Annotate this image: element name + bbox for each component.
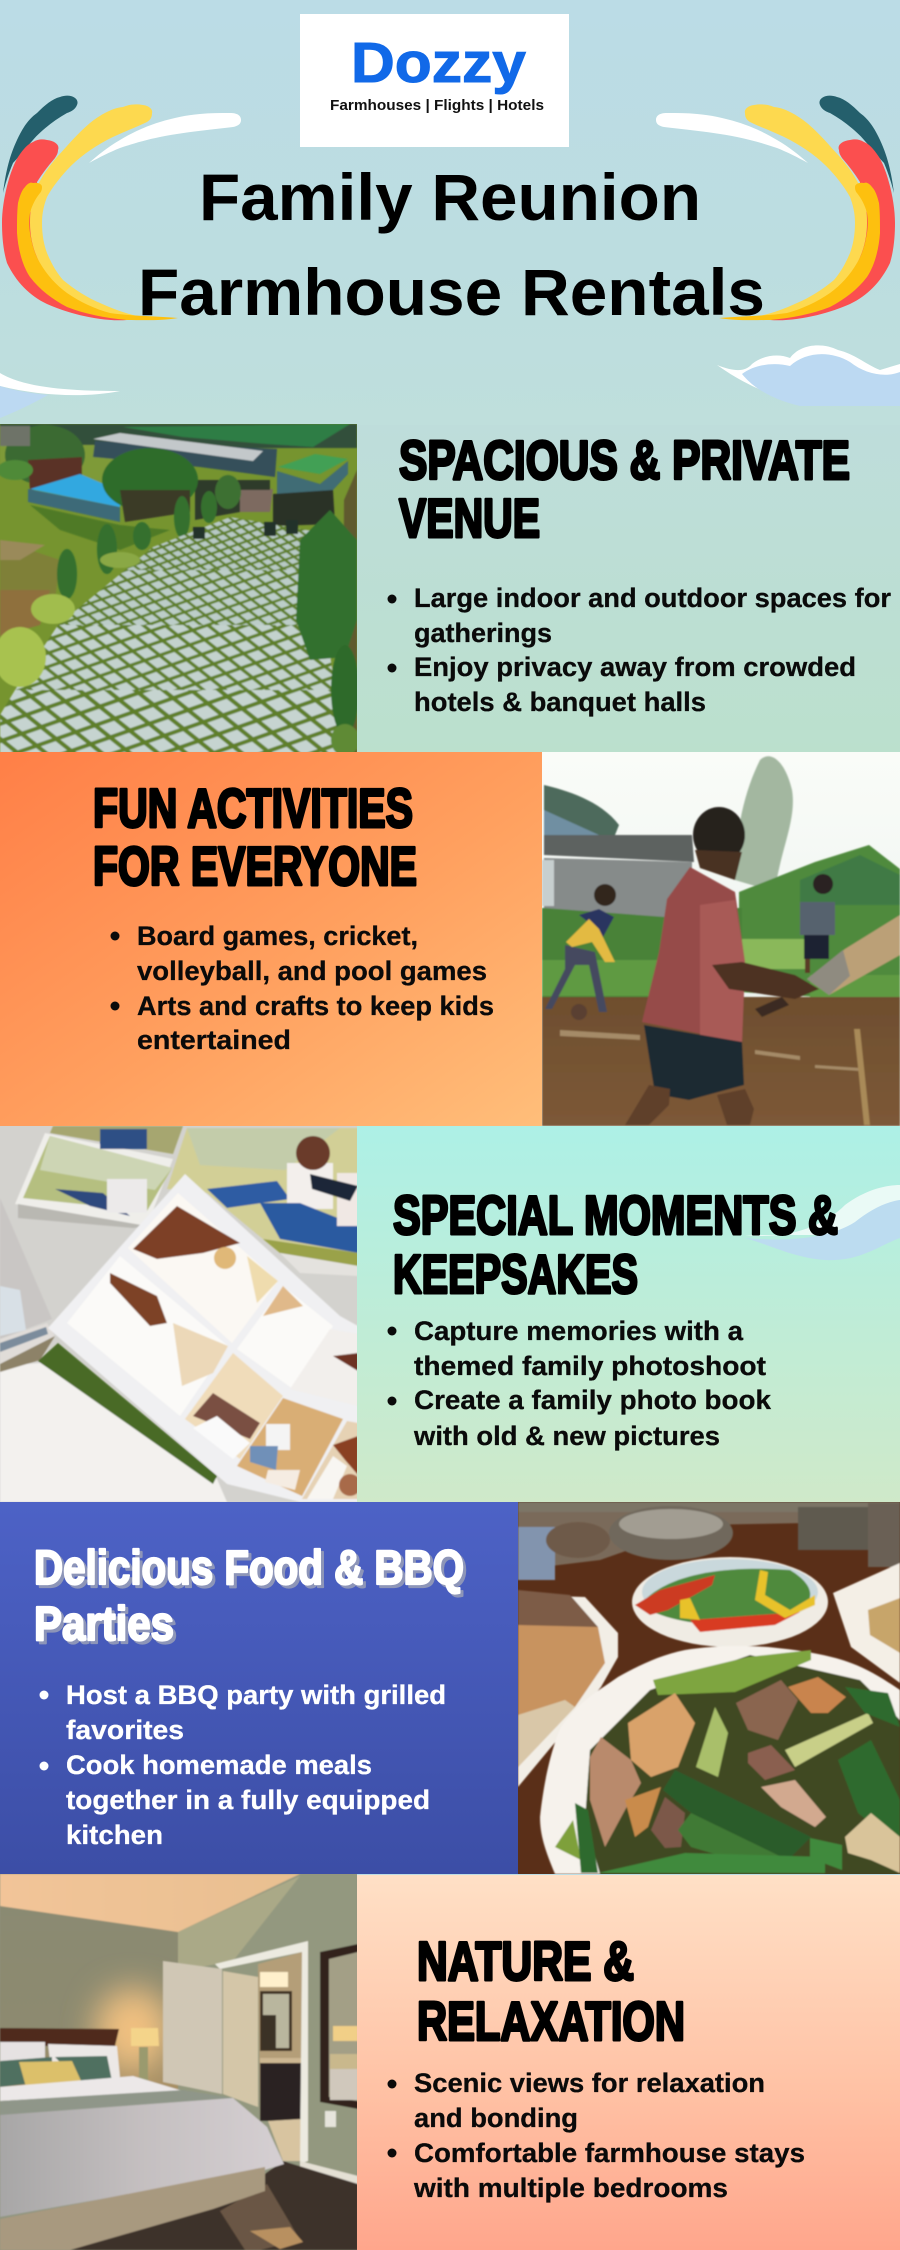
bullet list	[388, 583, 891, 717]
bullet list: Arts and crafts to keep kids	[137, 991, 494, 1021]
photo: aerial farmhouse with pool	[0, 424, 359, 756]
heading	[393, 1184, 838, 1305]
photo: boys playing cricket	[542, 752, 900, 1126]
bullet list: Scenic views for relaxation	[414, 2068, 765, 2098]
cloud: header right	[717, 345, 900, 406]
heading with shadow: Parties	[37, 1601, 177, 1654]
bullet list: gatherings	[414, 618, 552, 648]
bullet list: Capture memories with a	[414, 1316, 744, 1346]
heading with shadow: Parties	[34, 1598, 174, 1651]
heading with shadow: Delicious Food & BBQ	[34, 1542, 464, 1595]
bullet list: Board games, cricket,	[137, 921, 418, 951]
bullet list	[388, 1316, 772, 1451]
bullet list: Large indoor and outdoor spaces for	[414, 583, 891, 613]
heading: NATURE &	[417, 1930, 634, 1992]
bullet list: entertained	[137, 1025, 291, 1055]
heading	[417, 1930, 685, 2052]
heading: FOR EVERYONE	[93, 835, 417, 897]
photo: farmhouse bedroom	[0, 1874, 358, 2250]
bullet list	[110, 921, 494, 1055]
bullet list: Create a family photo book	[414, 1385, 772, 1415]
heading: FUN ACTIVITIES	[93, 777, 413, 839]
bullet list: hotels & banquet halls	[414, 687, 706, 717]
bullet list: Enjoy privacy away from crowded	[414, 652, 856, 682]
bullet list: favorites	[66, 1715, 184, 1745]
heading	[399, 429, 850, 549]
panel: delicious food and bbq parties	[0, 1502, 900, 1874]
heading with shadow	[34, 1542, 467, 1654]
header swirl: right	[656, 96, 895, 320]
panel: spacious and private venue	[0, 424, 900, 756]
heading with shadow: Delicious Food & BBQ	[37, 1545, 467, 1598]
bullet list: with old & new pictures	[413, 1421, 720, 1451]
heading: VENUE	[399, 487, 540, 549]
panel: nature and relaxation	[0, 1874, 900, 2250]
logo wordmark: Dozzy	[351, 31, 526, 95]
title: Farmhouse Rentals	[138, 255, 765, 329]
cloud: behind heading	[745, 1185, 900, 1260]
heading: KEEPSAKES	[393, 1243, 638, 1305]
bullet list: together in a fully equipped	[66, 1785, 430, 1815]
title: Family Reunion	[199, 160, 701, 234]
heading	[93, 777, 417, 897]
photo: family photo book	[0, 1126, 361, 1502]
bullet list: volleyball, and pool games	[137, 956, 487, 986]
bullet list	[388, 2068, 805, 2203]
header swirl: left	[2, 96, 241, 320]
logo tagline: Farmhouses | Flights | Hotels	[330, 98, 544, 114]
bullet list: with multiple bedrooms	[413, 2173, 728, 2203]
panel: fun activities for everyone	[0, 752, 900, 1126]
bullet list	[40, 1680, 446, 1850]
heading: RELAXATION	[417, 1990, 685, 2052]
bullet list: Cook homemade meals	[66, 1750, 372, 1780]
bullet list: Comfortable farmhouse stays	[414, 2138, 805, 2168]
bullet list: themed family photoshoot	[414, 1351, 766, 1381]
photo: plates of food	[518, 1502, 900, 1874]
bullet list: kitchen	[66, 1820, 163, 1850]
panel: special moments and keepsakes	[0, 1126, 900, 1502]
cloud: header left	[0, 373, 120, 418]
logo card	[300, 14, 569, 147]
bullet list: Host a BBQ party with grilled	[66, 1680, 446, 1710]
bullet list: and bonding	[414, 2103, 578, 2133]
title	[138, 160, 765, 329]
page background	[0, 0, 900, 425]
